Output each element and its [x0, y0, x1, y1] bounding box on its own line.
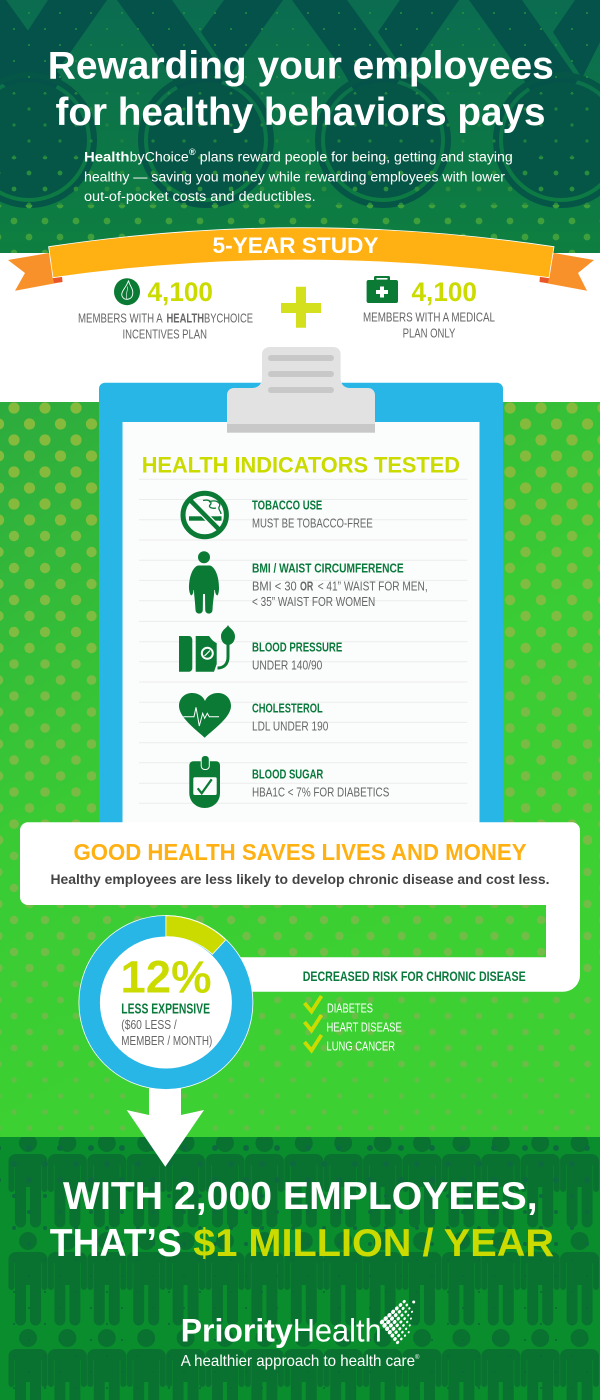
indicator: BMI and waist circumference: OR	[300, 579, 313, 593]
logo: Priority Health: Health	[293, 1313, 382, 1349]
icon: medical kit	[367, 276, 398, 303]
title	[48, 44, 554, 134]
icon: check marks	[304, 996, 322, 1050]
title: Rewarding your employees	[48, 44, 554, 87]
logo: Priority Health: Priority	[181, 1313, 293, 1349]
checklist: chronic diseases: DIABETES	[327, 1000, 373, 1015]
icon: glucose meter	[189, 756, 220, 808]
stat: medical plan members: 4,100	[412, 277, 477, 307]
indicator: blood sugar: HBA1C < 7% FOR DIABETICS	[252, 785, 389, 799]
stat: healthbychoice members: MEMBERS WITH A	[78, 312, 163, 326]
title: for healthy behaviors pays	[56, 91, 546, 134]
indicator: blood pressure: BLOOD PRESSURE	[252, 639, 343, 654]
stat: medical plan members: MEMBERS WITH A MEDICAL	[363, 311, 495, 325]
donut chart: 12% less expensive: LESS EXPENSIVE	[121, 1000, 210, 1017]
indicator: cholesterol: CHOLESTEROL	[252, 700, 323, 715]
logo: Priority Health: ®	[415, 1354, 420, 1361]
footer headline: THAT’S	[50, 1222, 182, 1265]
arrow	[127, 1085, 204, 1167]
stat: medical plan members: PLAN ONLY	[403, 327, 456, 341]
donut chart: 12% less expensive: 12%	[120, 951, 212, 1002]
checklist: chronic diseases	[304, 996, 402, 1053]
icon: leaf	[114, 278, 140, 305]
indicator: cholesterol	[179, 693, 328, 738]
indicator: tobacco use: MUST BE TOBACCO-FREE	[252, 516, 373, 530]
logo: Priority Health	[181, 1299, 422, 1370]
footer headline: WITH 2,000 EMPLOYEES,	[63, 1175, 538, 1218]
stat: healthbychoice members: BYCHOICE	[204, 312, 253, 326]
heading: health indicators tested: HEALTH INDICATORS TESTED	[142, 453, 460, 478]
icon: blood pressure cuff	[179, 625, 235, 672]
footer band with people pattern	[0, 1134, 600, 1400]
indicator: BMI and waist circumference	[189, 551, 428, 614]
indicator: BMI and waist circumference: < 35” WAIST FOR WOMEN	[252, 595, 375, 609]
ribbon: 5-year study	[8, 228, 594, 291]
indicator: blood pressure	[179, 625, 343, 672]
intro paragraph: plans reward people for being, getting and staying	[200, 149, 513, 164]
donut chart: 12% less expensive: ($60 LESS /	[121, 1017, 177, 1032]
notepad lines	[139, 479, 467, 803]
callout: good health saves lives and money: Healthy employees are less likely to develop chronic disease and cost less.	[50, 872, 550, 887]
callout: good health saves lives and money	[20, 822, 580, 992]
intro paragraph: byChoice	[130, 149, 189, 164]
donut chart: 12% less expensive	[79, 916, 253, 1090]
stat: healthbychoice members: INCENTIVES PLAN	[122, 328, 207, 342]
icon: heart with pulse	[179, 693, 231, 738]
indicator: blood sugar	[189, 756, 389, 808]
intro paragraph: out-of-pocket costs and deductibles.	[84, 189, 316, 204]
callout: good health saves lives and money: GOOD HEALTH SAVES LIVES AND MONEY	[74, 839, 526, 865]
intro paragraph	[84, 147, 513, 204]
stat: medical plan members	[363, 276, 495, 341]
intro paragraph: healthy — saving you money while rewarding employees with lower	[84, 169, 506, 184]
footer headline	[50, 1175, 554, 1265]
intro paragraph: Health	[84, 149, 130, 164]
indicator: cholesterol: LDL UNDER 190	[252, 719, 328, 733]
indicator: BMI and waist circumference: BMI < 30	[252, 579, 297, 593]
arrow tip over footer	[145, 1137, 186, 1167]
intro paragraph: ®	[189, 147, 196, 157]
clipboard	[99, 347, 503, 853]
icon: plus sign	[281, 287, 321, 328]
indicator: tobacco use	[183, 493, 373, 537]
clipboard clip	[227, 347, 375, 433]
footer headline: $1 MILLION / YEAR	[193, 1222, 554, 1265]
indicator: BMI and waist circumference: BMI / WAIST CIRCUMFERENCE	[252, 560, 404, 575]
indicator: blood pressure: UNDER 140/90	[252, 658, 322, 672]
indicator: tobacco use: TOBACCO USE	[252, 497, 323, 512]
callout: good health saves lives and money: DECREASED RISK FOR CHRONIC DISEASE	[303, 968, 526, 984]
logo: Priority Health: A healthier approach to health care	[181, 1353, 415, 1370]
icon: no smoking	[183, 493, 226, 537]
green dotted background	[0, 400, 600, 1137]
stat: healthbychoice members: 4,100	[148, 277, 213, 307]
indicator: blood sugar: BLOOD SUGAR	[252, 766, 324, 781]
ribbon: 5-year study: 5-YEAR STUDY	[212, 233, 379, 258]
indicator: BMI and waist circumference: < 41” WAIST FOR MEN,	[318, 579, 428, 593]
donut chart: 12% less expensive: MEMBER / MONTH)	[121, 1033, 212, 1048]
checklist: chronic diseases: HEART DISEASE	[326, 1019, 402, 1034]
stat: healthbychoice members: HEALTH	[166, 312, 204, 326]
icon: dotted logo mark	[379, 1299, 422, 1345]
icon: person	[189, 551, 219, 614]
stat: healthbychoice members	[78, 277, 253, 342]
checklist: chronic diseases: LUNG CANCER	[326, 1038, 395, 1053]
header background with diamonds, circles and dots	[0, 0, 600, 253]
